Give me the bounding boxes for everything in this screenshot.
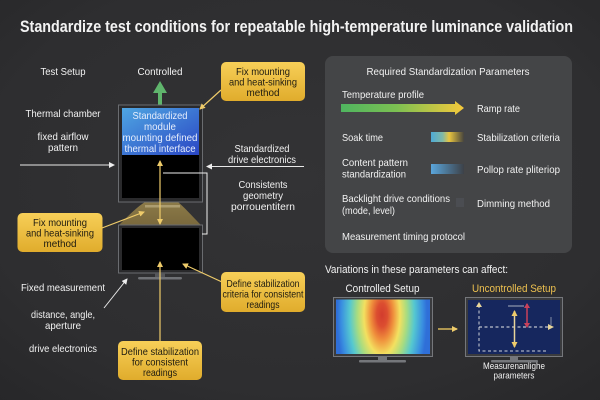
callout: top mounting: and heat-sinking [229, 76, 297, 88]
text: standardized module mounting: thermal interface [124, 143, 196, 155]
callout: left mounting: method [44, 238, 77, 250]
callout: left mounting: Fix mounting [33, 217, 87, 229]
heading: controlled: Controlled [138, 66, 183, 78]
row: soak time: Soak time [342, 132, 383, 144]
swatch: dimming [456, 198, 464, 207]
label: drive electronics: Standardized [234, 143, 290, 155]
label: geometry: Consistents [238, 179, 288, 191]
label: drive electronics: drive electronics [228, 154, 296, 166]
callout: bottom stabilization [118, 262, 202, 380]
row: backlight drive: Backlight drive conditions [342, 193, 450, 205]
text: standardized module mounting: mounting defined [122, 132, 198, 144]
upper monitor stand [145, 205, 180, 208]
label: distance angle aperture: aperture [45, 320, 81, 332]
callout: bottom stabilization: for consistent [132, 356, 188, 368]
callout: left mounting: and heat-sinking [26, 228, 94, 240]
callout: right stabilization: criteria for consistent [222, 288, 304, 300]
label: ramp rate: Ramp rate [477, 103, 520, 115]
callout: top mounting: Fix mounting [236, 66, 290, 78]
label: uncontrolled setup: Uncontrolled Setup [472, 283, 556, 295]
label: fixed measurement: Fixed measurement [21, 282, 105, 294]
row: temperature profile: Temperature profile [342, 89, 424, 101]
swatch: soak gradient [431, 132, 464, 142]
label: geometry: porrouentitern [231, 201, 295, 213]
caption: measurement parameters: parameters [494, 370, 535, 382]
panel: controlled setup [334, 283, 432, 362]
label: geometry: geometry [243, 190, 284, 202]
label: dimming method: Dimming method [477, 198, 550, 210]
text: standardized module mounting: module [144, 121, 176, 133]
arrow: airflow into chamber [20, 164, 114, 166]
callout: bottom stabilization: Define stabilization [121, 346, 199, 358]
monitor: lower module [118, 225, 202, 280]
label: drive electronics lower: drive electronics [29, 343, 97, 355]
panel: uncontrolled setup [466, 283, 562, 382]
caption: measurement parameters: Measurenanlighe [483, 361, 545, 372]
cone of light between monitors [119, 198, 201, 225]
label: airflow pattern: fixed airflow [38, 131, 89, 143]
text: standardized module mounting: Standardized [132, 110, 188, 122]
callout: right stabilization: Define stabilization [226, 278, 300, 290]
callout: right stabilization [183, 264, 305, 312]
row: backlight drive: (mode, level) [342, 205, 395, 217]
callout: top mounting: method [246, 87, 280, 99]
row: content pattern: standardization [342, 168, 406, 180]
monitor: uncontrolled chart [466, 298, 562, 362]
label: airflow pattern: pattern [48, 142, 78, 154]
callout: bottom stabilization: readings [143, 367, 177, 379]
arrow: controlled to uncontrolled [438, 328, 457, 330]
callout: left mounting [18, 212, 144, 252]
heading: test setup: Test Setup [40, 66, 86, 78]
arrow: temperature gradient [341, 101, 464, 115]
panel: required standardization parameters [325, 56, 572, 253]
panel heading: Required Standardization Parameters [366, 66, 530, 78]
row: content pattern: Content pattern [342, 157, 408, 169]
row: measurement timing: Measurement timing protocol [342, 231, 465, 243]
label: controlled setup: Controlled Setup [346, 283, 420, 295]
arrow: measurement pointer [104, 279, 127, 308]
panel: test setup diagram [18, 62, 305, 380]
arrow: double-headed measurement axis [159, 161, 161, 224]
label: distance angle aperture: distance, angle, [31, 309, 95, 321]
monitor: heat map [334, 298, 432, 362]
callout: right stabilization: readings [246, 299, 280, 311]
label: stabilization criteria: Stabilization criteria [477, 132, 560, 144]
label: pollop rate: Pollop rate pliteriop [477, 164, 560, 176]
swatch: pattern gradient [431, 164, 464, 174]
monitor: upper module [118, 105, 202, 202]
label: thermal chamber: Thermal chamber [26, 108, 101, 120]
heading: variations: Variations in these parameters can affect: [325, 264, 508, 276]
arrow: drive into chamber [207, 166, 304, 168]
connector: white bracket [163, 173, 207, 234]
callout: top mounting [200, 62, 305, 109]
icon: green up arrow [153, 81, 167, 105]
